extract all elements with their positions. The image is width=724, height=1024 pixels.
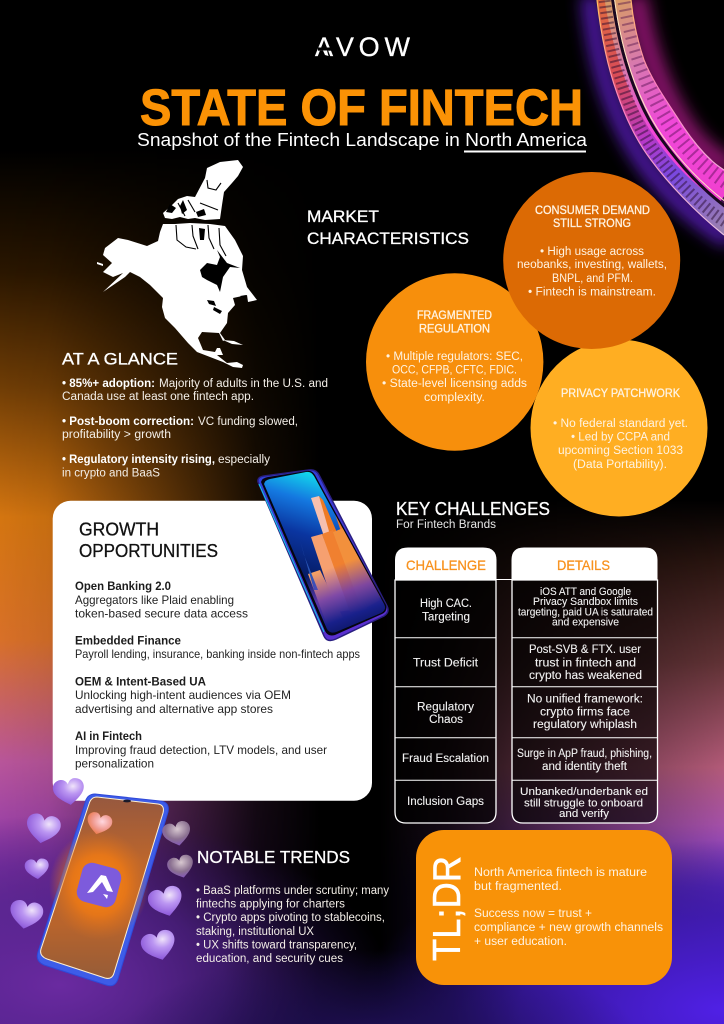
section: at a glance <box>62 350 328 480</box>
section: at a glance: • Regulatory intensity rising, <box>62 454 215 466</box>
heading: market characteristics: CHARACTERISTICS <box>307 230 469 248</box>
table: challenges and details: and identity theft <box>542 761 628 773</box>
table: challenges and details: crypto has weakened <box>529 670 642 682</box>
panel: growth opportunities: AI in Fintech <box>75 729 142 743</box>
table: challenges and details: No unified framework: <box>527 694 643 706</box>
section: at a glance: especially <box>218 454 270 466</box>
heading: market characteristics: MARKET <box>307 208 379 226</box>
panel: growth opportunities: Payroll lending, insurance, banking inside non-fintech apps <box>75 647 360 661</box>
circle: privacy patchwork: PRIVACY PATCHWORK <box>561 388 680 400</box>
table: challenges and details: iOS ATT and Google <box>540 586 631 598</box>
section: at a glance: AT A GLANCE <box>62 350 178 368</box>
circle: fragmented regulation: REGULATION <box>419 324 490 336</box>
panel: growth opportunities: GROWTH <box>79 520 159 540</box>
section: notable trends: education, and security cues <box>196 953 343 965</box>
circle: consumer demand: • Fintech is mainstream. <box>528 287 656 299</box>
logo: AVOW: AVOW <box>315 32 411 62</box>
table: challenges and details: DETAILS <box>557 557 610 573</box>
panel: growth opportunities: Aggregators like Plaid enabling <box>75 593 234 607</box>
circle: privacy patchwork: • Led by CCPA and <box>571 432 670 444</box>
circle: privacy patchwork: upcoming Section 1033 <box>558 445 683 457</box>
panel: growth opportunities <box>53 501 372 801</box>
table: challenges and details: regulatory whiplash <box>533 719 637 731</box>
panel: TL;DR <box>416 830 672 985</box>
panel: growth opportunities: personalization <box>75 757 154 771</box>
section: key challenges heading: For Fintech Brands <box>396 519 496 531</box>
title: STATE OF FINTECH <box>140 79 583 136</box>
panel: growth opportunities: OEM & Intent-Based UA <box>75 675 206 689</box>
circle: fragmented regulation: • State-level licensing adds <box>382 378 527 390</box>
panel: TL;DR: compliance + new growth channels <box>474 922 663 934</box>
circle: consumer demand: CONSUMER DEMAND <box>535 205 650 217</box>
table: challenges and details: Regulatory <box>417 702 474 714</box>
section: notable trends: • Crypto apps pivoting to stablecoins, <box>196 912 385 924</box>
table: challenges and details: Trust Deficit <box>413 658 479 670</box>
panel: TL;DR: North America fintech is mature <box>474 867 647 879</box>
section: at a glance: VC funding slowed, <box>198 416 298 428</box>
circle: privacy patchwork: • No federal standard yet. <box>553 418 688 430</box>
table: challenges and details <box>395 548 658 823</box>
circle: fragmented regulation: FRAGMENTED <box>417 310 492 322</box>
map: North America <box>97 160 257 368</box>
section: notable trends: staking, institutional UX <box>196 926 314 938</box>
section: at a glance: Canada use at least one fintech app. <box>62 391 254 403</box>
circle: fragmented regulation: OCC, CFPB, CFTC, FDIC. <box>392 365 517 377</box>
circle: fragmented regulation: complexity. <box>424 392 485 404</box>
circle: consumer demand: neobanks, investing, wallets, <box>517 259 667 271</box>
circle: fragmented regulation: • Multiple regulators: SEC, <box>386 351 523 363</box>
section: notable trends: NOTABLE TRENDS <box>197 847 350 867</box>
panel: TL;DR: but fragmented. <box>474 881 562 893</box>
panel: growth opportunities: Embedded Finance <box>75 634 181 648</box>
panel: TL;DR: Success now = trust + <box>474 908 592 920</box>
section: key challenges heading: KEY CHALLENGES <box>396 499 550 519</box>
circle: consumer demand <box>503 172 680 349</box>
table: challenges and details: CHALLENGE <box>406 557 486 573</box>
panel: TL;DR: TL;DR <box>426 856 469 961</box>
heading: market characteristics <box>307 208 469 248</box>
table: challenges and details: High CAC. <box>420 598 472 610</box>
table: challenges and details: and verify <box>559 808 610 820</box>
circle: privacy patchwork: (Data Portability). <box>573 459 667 471</box>
phone with hearts illustration <box>7 777 196 986</box>
panel: TL;DR: + user education. <box>474 936 567 948</box>
panel: growth opportunities: advertising and alternative app stores <box>75 702 273 716</box>
table: challenges and details: targeting, paid UA is saturated <box>518 607 653 619</box>
panel: growth opportunities: token-based secure data access <box>75 606 248 620</box>
section: notable trends: fintechs applying for charters <box>196 898 345 910</box>
circle: consumer demand: STILL STRONG <box>553 218 631 230</box>
table: challenges and details: Inclusion Gaps <box>407 796 484 808</box>
table: challenges and details: Fraud Escalation <box>402 753 489 765</box>
circle: privacy patchwork <box>530 340 708 516</box>
panel: growth opportunities: Unlocking high-intent audiences via OEM <box>75 688 291 702</box>
table: challenges and details: Unbanked/underbank ed <box>520 786 648 798</box>
panel: growth opportunities: OPPORTUNITIES <box>79 541 218 561</box>
section: notable trends <box>196 847 389 965</box>
section: notable trends: • BaaS platforms under scrutiny; many <box>196 885 389 897</box>
table: challenges and details: crypto firms face <box>540 707 630 719</box>
table: challenges and details: Chaos <box>429 714 463 726</box>
circle: fragmented regulation <box>366 273 543 451</box>
section: at a glance: in crypto and BaaS <box>62 468 160 480</box>
section: notable trends: • UX shifts toward transparency, <box>196 940 357 952</box>
neon arc decoration <box>590 0 724 240</box>
table: challenges and details: Surge in ApP fraud, phishing, <box>517 748 652 760</box>
subtitle: Snapshot of the Fintech Landscape in North America <box>137 130 588 150</box>
table: challenges and details: Targeting <box>422 612 470 624</box>
table: challenges and details: trust in fintech and <box>535 658 636 670</box>
section: at a glance: profitability > growth <box>62 429 171 441</box>
phone with chart screen <box>255 465 390 640</box>
section: at a glance: • 85%+ adoption: <box>62 378 155 390</box>
table: challenges and details: and expensive <box>552 617 619 629</box>
section: at a glance: Majority of adults in the U.S. and <box>159 378 328 390</box>
panel: growth opportunities: Improving fraud detection, LTV models, and user <box>75 743 327 757</box>
table: challenges and details: Privacy Sandbox limits <box>533 596 638 608</box>
table: challenges and details: Post-SVB & FTX. user <box>529 644 641 656</box>
circle: consumer demand: • High usage across <box>540 246 644 258</box>
panel: growth opportunities: Open Banking 2.0 <box>75 579 171 593</box>
circle: consumer demand: BNPL, and PFM. <box>552 273 633 285</box>
section: at a glance: • Post-boom correction: <box>62 416 194 428</box>
table: challenges and details: still struggle to onboard <box>524 798 643 810</box>
section: key challenges heading <box>396 499 550 531</box>
